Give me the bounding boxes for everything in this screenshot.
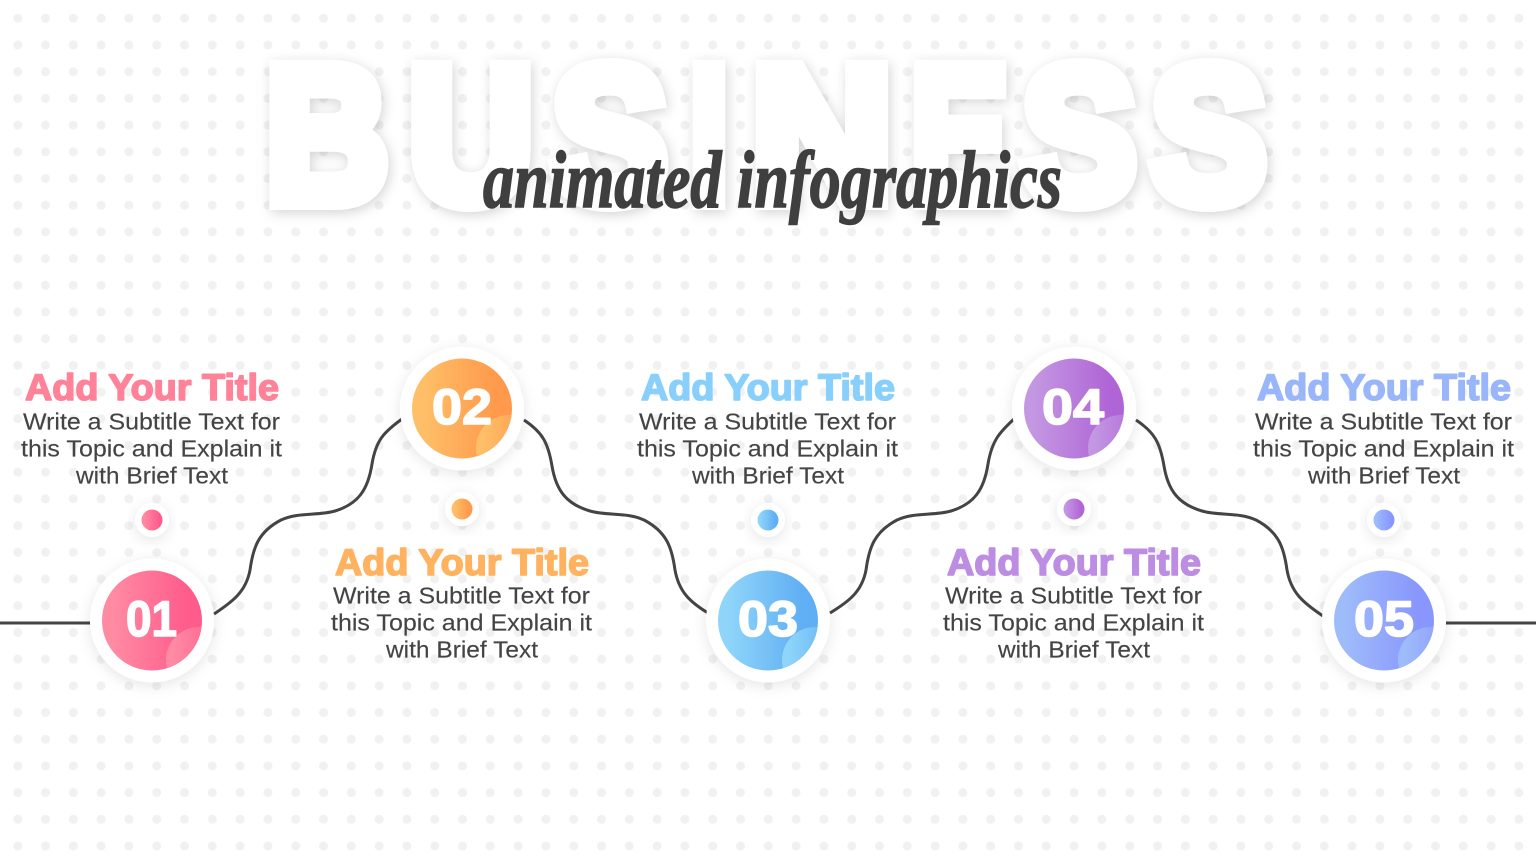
step 02 — [331, 346, 593, 662]
step 03 — [637, 367, 899, 693]
step 02 number badge — [398, 358, 526, 476]
step 03 description — [637, 408, 899, 488]
step 03 description: Write a Subtitle Text for — [639, 408, 896, 434]
heading: BUSINESS background word: B — [266, 27, 388, 242]
step 05 marker dot — [1367, 503, 1401, 537]
step 04 description: this Topic and Explain it — [943, 610, 1205, 636]
step 02 description: Write a Subtitle Text for — [333, 582, 590, 608]
step 05 number badge: 05 — [1354, 591, 1414, 647]
step 02 title: Add Your Title — [335, 542, 589, 583]
heading: BUSINESS background word: N — [752, 27, 892, 242]
step 04 title: Add Your Title — [947, 542, 1201, 583]
step 03 description: with Brief Text — [691, 462, 844, 488]
step 04 number badge — [1010, 358, 1138, 476]
step 04 description: Write a Subtitle Text for — [945, 582, 1202, 608]
step 05 description — [1253, 408, 1515, 488]
step 02 description: this Topic and Explain it — [331, 610, 593, 636]
step 03 marker dot — [751, 503, 785, 537]
step 03 number badge — [704, 570, 832, 688]
heading: BUSINESS background word: E — [911, 27, 1008, 242]
heading: BUSINESS background word: S — [1151, 27, 1266, 242]
step 02 marker dot — [445, 492, 479, 526]
step 04 description — [943, 582, 1205, 662]
connector line — [0, 419, 1536, 623]
step 05 description: Write a Subtitle Text for — [1255, 408, 1512, 434]
step 01 number badge — [88, 570, 216, 688]
step 03 description: this Topic and Explain it — [637, 436, 899, 462]
step 02 description — [331, 582, 593, 662]
step 01 description: with Brief Text — [75, 462, 228, 488]
step 03 number badge: 03 — [738, 591, 798, 647]
step 01 marker dot — [135, 503, 169, 537]
heading: BUSINESS background word: S — [1022, 27, 1136, 242]
step 05 — [1253, 367, 1515, 693]
step 04 description: with Brief Text — [997, 636, 1150, 662]
step 01 title: Add Your Title — [25, 367, 279, 408]
heading: BUSINESS background word — [266, 27, 1266, 242]
step 02 number badge: 02 — [432, 379, 492, 435]
step 01 description: Write a Subtitle Text for — [23, 408, 280, 434]
step 01 — [21, 367, 283, 693]
step 05 description: this Topic and Explain it — [1253, 436, 1515, 462]
heading: BUSINESS background word: I — [690, 27, 728, 242]
step 05 title: Add Your Title — [1257, 367, 1511, 408]
step 05 number badge — [1320, 570, 1448, 688]
step 04 — [943, 346, 1205, 662]
heading: BUSINESS background word: S — [552, 27, 667, 242]
step 04 marker dot — [1057, 492, 1091, 526]
step 02 description: with Brief Text — [385, 636, 538, 662]
heading: BUSINESS background word: U — [409, 27, 533, 242]
step 01 number badge: 01 — [126, 591, 177, 647]
step 01 description: this Topic and Explain it — [21, 436, 283, 462]
step 05 description: with Brief Text — [1307, 462, 1460, 488]
step 04 number badge: 04 — [1042, 379, 1104, 435]
step 01 description — [21, 408, 283, 488]
heading: animated infographics script: animated infographics — [483, 134, 1062, 225]
step 03 title: Add Your Title — [641, 367, 895, 408]
